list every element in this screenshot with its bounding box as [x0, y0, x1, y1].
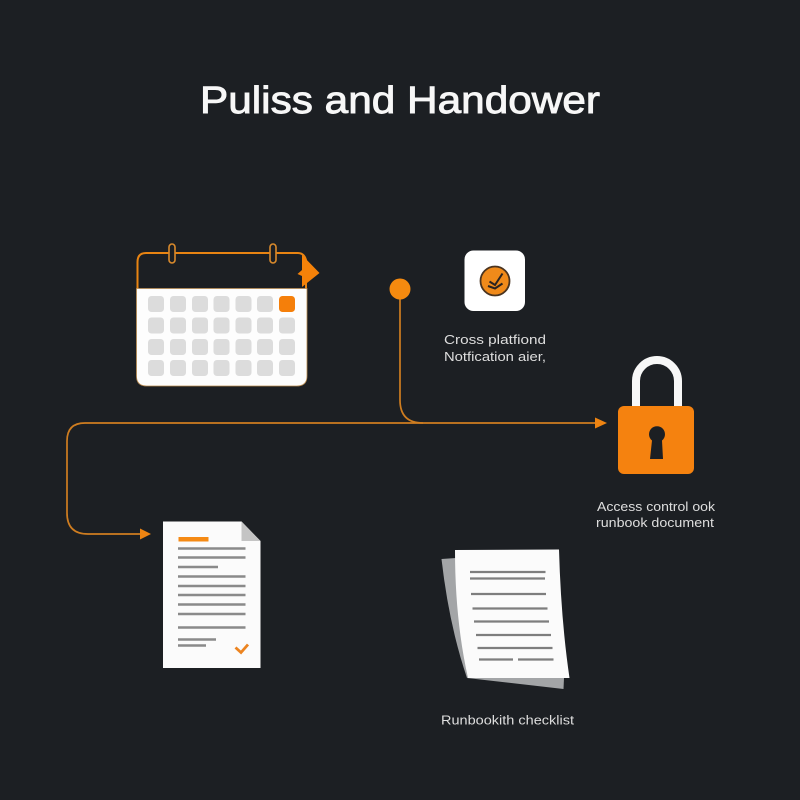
- calendar rings: [169, 244, 276, 263]
- front sheet: [455, 550, 570, 678]
- calendar header outline: [138, 253, 306, 290]
- back sheet: [442, 558, 564, 689]
- icon: runbook document: [163, 522, 260, 668]
- icon: padlock: [618, 360, 694, 474]
- text: access control label: runbook document: [596, 515, 714, 530]
- badge background: [464, 250, 525, 311]
- padlock body: [618, 406, 694, 474]
- text: notification label: Cross platfiond: [444, 332, 546, 347]
- calendar day cells: [148, 296, 295, 376]
- calendar highlighted day: [279, 296, 295, 312]
- arrow: into lock: [595, 418, 607, 428]
- icon: timeline node dot: [390, 278, 410, 300]
- connector: main flow line from lock arrow to document: [67, 299, 597, 534]
- calendar flag arrow: [298, 255, 320, 287]
- text: access control label: Access control ook: [597, 499, 716, 514]
- sheet text lines: [470, 572, 554, 660]
- badge check marks: [488, 274, 502, 288]
- text: checklist label: Runbookith checklist: [441, 712, 574, 728]
- padlock keyhole: [649, 426, 665, 459]
- title: Puliss and Handower: [200, 80, 600, 122]
- text: notification label: [444, 332, 546, 364]
- icon: notification badge: [464, 250, 525, 311]
- document heading bar: [178, 537, 208, 542]
- document text lines: [178, 548, 246, 646]
- calendar body: [136, 288, 307, 386]
- badge circle: [480, 266, 510, 296]
- text: access control label: [596, 499, 716, 530]
- arrow: into document: [140, 528, 151, 540]
- icon: checklist paper stack: [442, 550, 570, 689]
- document page: [163, 522, 260, 668]
- document corner fold: [242, 522, 260, 541]
- document check mark: [236, 644, 248, 652]
- icon: calendar: [136, 244, 320, 386]
- padlock shackle: [636, 360, 678, 408]
- text: notification label: Notfication aier,: [444, 349, 546, 364]
